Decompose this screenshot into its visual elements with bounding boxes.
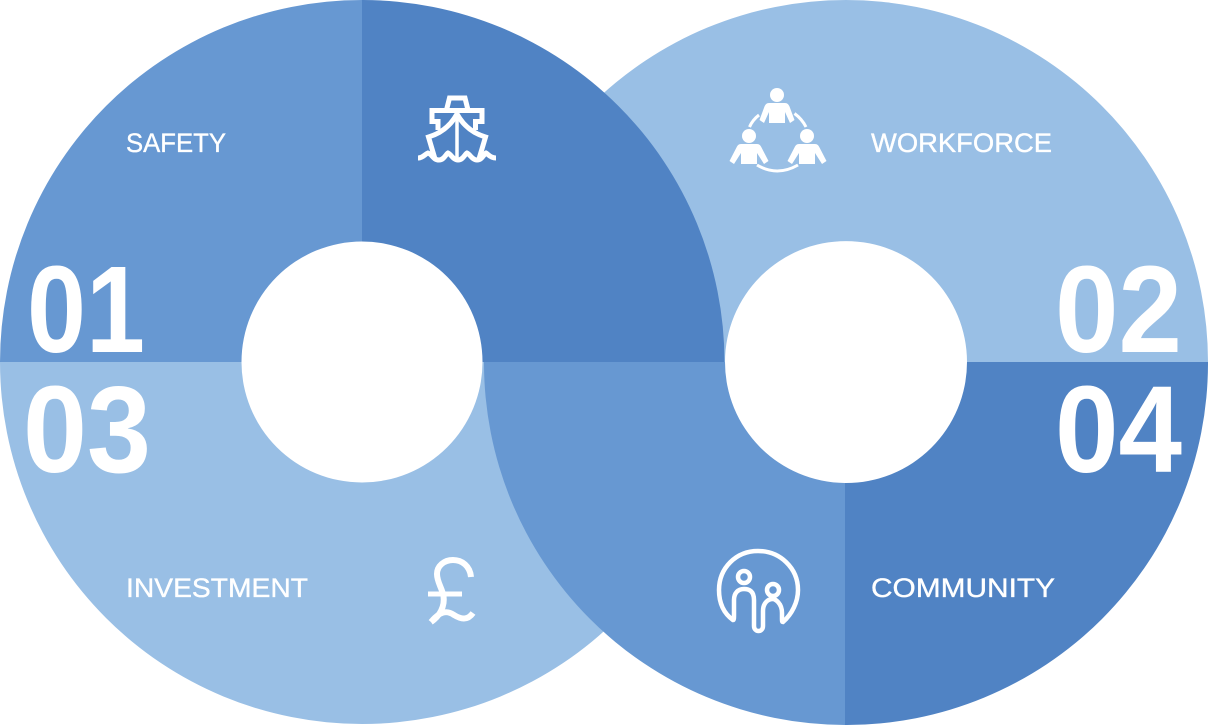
segment: workforce (right ring, top): [484, 0, 1208, 362]
icon: pound sign: [428, 560, 473, 622]
heading: workforce: WORKFORCE: [871, 128, 1052, 158]
segment: community (right ring, bottom-right): [845, 362, 1208, 725]
heading: community: COMMUNITY: [871, 573, 1055, 603]
icon: ship: [418, 98, 496, 160]
person: left: [730, 129, 768, 164]
number: 04: 04: [1055, 362, 1182, 499]
segment: safety (left ring, top-left): [0, 0, 362, 362]
number: 02: 02: [1055, 242, 1182, 379]
icon: community family in circle: [719, 551, 798, 631]
heading: investment: INVESTMENT: [126, 573, 308, 603]
segment: community (right ring, bottom-left): [484, 362, 845, 725]
segment: investment (left ring, bottom): [0, 362, 724, 724]
number: 01: 01: [27, 242, 145, 379]
number: 03: 03: [23, 362, 151, 499]
segment: safety (left ring, top-right): [362, 0, 725, 362]
icon: workforce circle of people: [730, 88, 826, 171]
heading: safety: SAFETY: [126, 128, 226, 158]
person: right: [788, 129, 826, 164]
person: top: [760, 88, 794, 123]
connecting arcs: [750, 114, 806, 171]
